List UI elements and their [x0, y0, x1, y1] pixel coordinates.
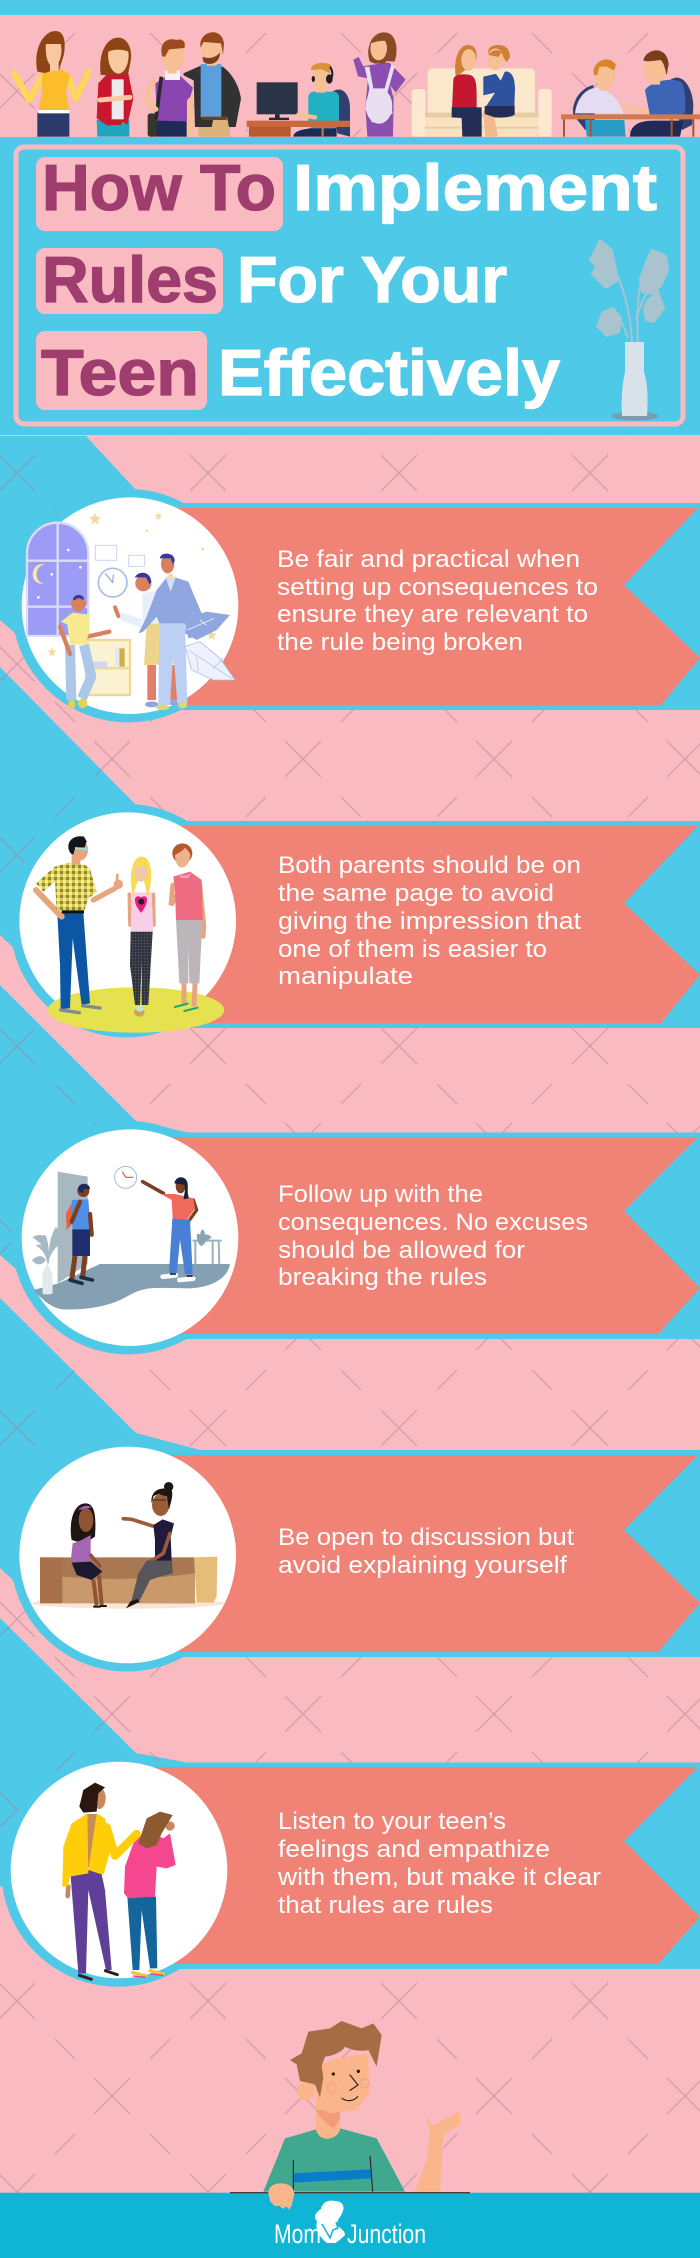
monitor and desk [247, 63, 350, 137]
tip 5 text: with them, but make it clear [277, 1864, 601, 1891]
header illustration: families [14, 31, 700, 137]
panel: tip 1 [12, 489, 700, 722]
tip 2 text: Both parents should be on [278, 852, 581, 879]
tip 3 text: breaking the rules [278, 1264, 487, 1291]
panel: tip 4 [10, 1438, 700, 1672]
illustration: two women on sofa [32, 1482, 225, 1609]
title text [41, 151, 657, 409]
tip 2 text: the same page to avoid [278, 880, 554, 907]
panel: tip 3 [12, 1121, 700, 1354]
tip 2 text: giving the impression that [278, 908, 581, 935]
panel: tip 5 [1, 1753, 700, 1987]
title text: Implement [293, 151, 657, 224]
right half of header [353, 32, 700, 137]
title highlight chips [36, 157, 283, 410]
tip 2 text: manipulate [278, 963, 413, 990]
tip 1 text: setting up consequences to [277, 574, 598, 601]
father in dark jacket [183, 31, 241, 137]
tip 4 text [278, 1524, 574, 1579]
woman in yellow [14, 31, 89, 137]
tip 3 text: Follow up with the [278, 1181, 483, 1208]
parent and teen at table [561, 50, 700, 137]
tip 5 text: feelings and empathize [278, 1836, 550, 1863]
tip 1 text [277, 546, 598, 656]
illustration: mother comforting daughter [62, 1783, 176, 1979]
tip 1 text: ensure they are relevant to [277, 601, 588, 628]
logo: MomJunction: Mom [274, 2219, 321, 2249]
logo: MomJunction [274, 2201, 426, 2249]
tip 2 text [278, 852, 581, 990]
woman in purple dress [353, 32, 406, 137]
footer bar [0, 2193, 700, 2258]
title text: How To [42, 151, 276, 224]
tip 3 text: consequences. No excuses [278, 1209, 588, 1236]
tip 5 text: Listen to your teen’s [278, 1808, 506, 1835]
tip 3 text: should be allowed for [278, 1237, 525, 1264]
illustration: boy at table [230, 2021, 470, 2210]
logo: MomJunction: Junction [347, 2219, 426, 2249]
tip 3 text [278, 1181, 588, 1291]
woman in red jacket [97, 38, 133, 137]
tip 5 text: that rules are rules [278, 1892, 493, 1919]
illustration: parents and daughter [36, 836, 224, 1033]
tip 4 text: Be open to discussion but [278, 1524, 574, 1551]
tip 4 text: avoid explaining yourself [278, 1552, 567, 1579]
tip 1 text: the rule being broken [277, 629, 523, 656]
title text: Rules [42, 243, 218, 316]
tip 5 text [277, 1808, 601, 1919]
illustration: mother pointing at clock [32, 1166, 230, 1309]
illustration: parents talking to teen at night [27, 512, 235, 710]
title text: Teen [41, 336, 199, 409]
panel: tip 2 [10, 804, 700, 1037]
tip 2 text: one of them is easier to [278, 936, 547, 963]
title panel [0, 137, 700, 435]
left half of header [14, 31, 350, 137]
decorative vase with plant [590, 240, 668, 420]
teen boy in purple [146, 39, 193, 137]
title text: For Your [237, 243, 507, 316]
tip 1 text: Be fair and practical when [277, 546, 580, 573]
sofa with two women [412, 45, 552, 137]
blue diagonal side shapes [0, 436, 200, 1887]
top blue bar [0, 0, 700, 15]
title text: Effectively [218, 336, 560, 409]
